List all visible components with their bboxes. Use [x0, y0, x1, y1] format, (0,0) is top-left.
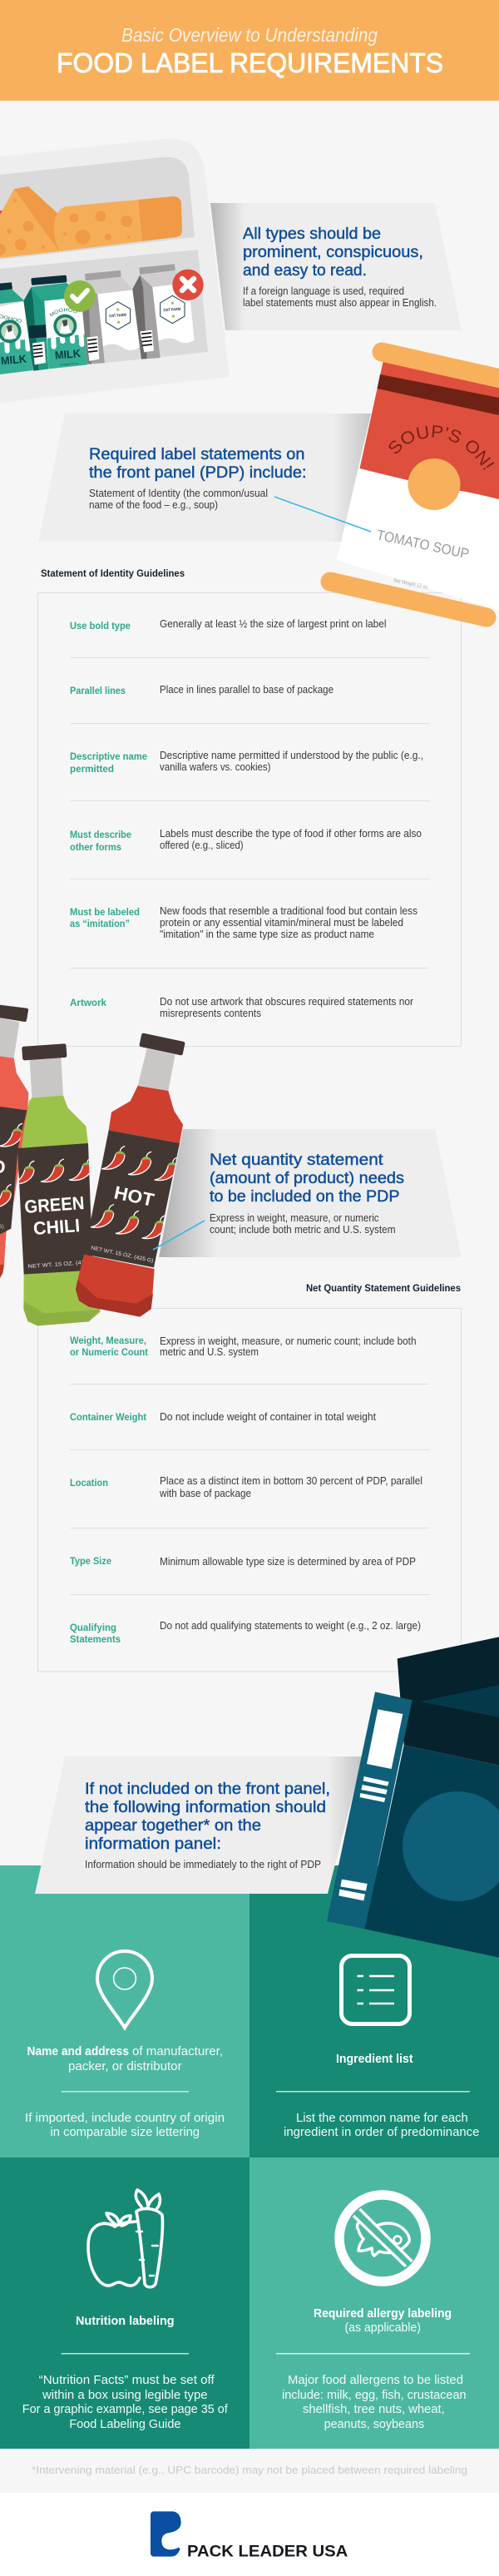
carton D: [132, 264, 195, 359]
callout heading: information panel:: [85, 1835, 221, 1853]
subtitle: Basic Overview to Understanding: [121, 24, 378, 46]
row: artwork: misrepresents contents: [160, 1008, 261, 1019]
cell: required allergy labeling: Required allergy labeling: [314, 2307, 452, 2321]
panel: net quantity guidelines table: [38, 1308, 461, 1672]
callout heading: If not included on the front panel,: [85, 1780, 330, 1798]
cell: nutrition labeling: within a box using legible type: [42, 2389, 208, 2402]
callout body: [89, 488, 268, 511]
callout body: [210, 1212, 396, 1236]
row: use bold type: [70, 618, 386, 632]
logo wordmark: PACK LEADER USA: [187, 2544, 348, 2561]
row: must be labeled as imitation: protein or any essential vitamin/mineral must be labeled: [160, 917, 403, 929]
icon: apple and carrot: [88, 2190, 162, 2287]
can brand text: SOUP’S ON!: [389, 425, 494, 470]
callout heading: the front panel (PDP) include:: [89, 463, 306, 482]
row: must be labeled as imitation: New foods that resemble a traditional food but contain less: [160, 905, 417, 917]
logo mark: [151, 2511, 181, 2557]
row: location: Place as a distinct item in bottom 30 percent of PDP, parallel: [160, 1475, 422, 1487]
title: FOOD LABEL REQUIREMENTS: [57, 47, 443, 78]
logo: pack leader usa: [151, 2511, 348, 2561]
callout heading: to be included on the PDP: [210, 1187, 399, 1206]
panel: statement of identity guidelines table: [38, 592, 461, 1047]
cell: required allergy labeling: include: milk, egg, fish, crustacean: [282, 2389, 467, 2402]
row: qualifying statements: [70, 1620, 421, 1645]
callout body: label statements must also appear in English.: [243, 297, 437, 309]
cell: nutrition labeling: For a graphic example, see page 35 of: [22, 2403, 229, 2416]
row: must describe other forms: Labels must describe the type of food if other forms are also: [160, 828, 422, 840]
row: use bold type: Generally at least ½ the size of largest print on label: [160, 618, 386, 630]
icon: no fish: [339, 2195, 426, 2281]
callout: required label statements: [38, 414, 374, 542]
row: must be labeled as imitation: "imitation" in the same type size as product name: [160, 929, 374, 940]
row: qualifying statements: Do not add qualifying statements to weight (e.g., 2 oz. large): [160, 1620, 421, 1632]
illustration: hot sauce bottles: [0, 1004, 185, 1325]
callout heading: appear together* on the: [85, 1816, 261, 1835]
hot bottle: NET WT. 15 OZ. (425 G): [91, 1245, 154, 1264]
callout heading: [210, 1151, 404, 1206]
icon: green check: [64, 280, 96, 312]
callout heading: [89, 445, 306, 482]
green chili bottle: NET WT. 15 OZ. (425 G): [27, 1259, 97, 1270]
cell: name and address: packer, or distributor: [68, 2060, 182, 2073]
row: weight measure or numeric count: Weight, Measure,: [70, 1335, 146, 1346]
carton B: net weight 16 fl. oz.: [60, 361, 79, 366]
illustration: stacked books: [327, 1637, 499, 1958]
callout body: If a foreign language is used, required: [243, 285, 404, 297]
row: must describe other forms: Must describe: [70, 829, 131, 840]
row: descriptive name permitted: Descriptive name permitted if understood by the public (e.g.,: [160, 750, 423, 761]
callout: all types prominent: [210, 203, 462, 330]
row: must describe other forms: offered (e.g., sliced): [160, 840, 244, 851]
heading: statement of identity guidelines: Statement of Identity Guidelines: [41, 567, 185, 579]
icon: milk and oat cartons: [0, 264, 195, 374]
row: weight measure or numeric count: or Numeric Count: [70, 1346, 148, 1358]
carton C: [82, 270, 141, 364]
row: descriptive name permitted: [70, 750, 423, 775]
row: must describe other forms: other forms: [70, 841, 121, 853]
heading: net quantity statement guidelines: Net Quantity Statement Guidelines: [306, 1282, 461, 1294]
row: parallel lines: [70, 684, 333, 696]
row: parallel lines: Place in lines parallel to base of package: [160, 684, 333, 696]
cell: ingredient list: [276, 1955, 479, 2139]
callout body: count; include both metric and U.S. system: [210, 1224, 396, 1236]
cell: required allergy labeling: [276, 2195, 470, 2431]
callout heading: and easy to read.: [243, 261, 367, 280]
row: location: with base of package: [159, 1488, 251, 1499]
cell: ingredient list: ingredient in order of predominance: [284, 2126, 479, 2139]
row: parallel lines: Parallel lines: [70, 685, 126, 696]
row: container weight: [70, 1411, 376, 1423]
cell: required allergy labeling: Major food allergens to be listed: [288, 2374, 463, 2387]
row: container weight: Container Weight: [70, 1411, 146, 1423]
callout heading: the following information should: [85, 1798, 326, 1816]
cell: nutrition labeling: Nutrition labeling: [76, 2315, 175, 2328]
cell: name and address: [25, 1951, 225, 2139]
cell: nutrition labeling: Food Labeling Guide: [69, 2418, 180, 2431]
carton B: [23, 275, 87, 371]
cell: required allergy labeling: (as applicable): [344, 2321, 421, 2335]
cell: required allergy labeling: peanuts, soybeans: [324, 2418, 424, 2431]
carton A: [0, 282, 32, 374]
header banner: [0, 0, 499, 101]
carton D: OAT FARM: [163, 307, 180, 313]
carton A: MILK: [0, 353, 27, 367]
callout heading: Net quantity statement: [210, 1151, 383, 1169]
row: artwork: Do not use artwork that obscures required statements nor: [160, 996, 413, 1008]
callout heading: [85, 1780, 330, 1853]
hot bottle: HOT: [112, 1181, 156, 1211]
callout heading: All types should be: [243, 225, 381, 243]
cell: name and address: in comparable size lettering: [50, 2126, 200, 2139]
row: type size: Minimum allowable type size is determined by area of PDP: [160, 1556, 416, 1568]
callout: net quantity statement: [159, 1129, 462, 1257]
carton C: OAT FARM: [109, 313, 126, 319]
callout body: [243, 285, 437, 309]
callout body: Express in weight, measure, or numeric: [210, 1212, 379, 1224]
row: artwork: Artwork: [70, 997, 106, 1008]
callout body: Information should be immediately to the right of PDP: [85, 1859, 321, 1870]
row: descriptive name permitted: Descriptive name: [70, 751, 147, 762]
icon: cheese: [0, 186, 182, 258]
callout heading: (amount of product) needs: [210, 1169, 404, 1187]
row: descriptive name permitted: permitted: [70, 763, 114, 775]
row: location: [70, 1475, 422, 1499]
can bottom lid: [330, 582, 487, 617]
row: must be labeled as imitation: [70, 905, 417, 940]
green chili bottle: GREEN: [24, 1192, 85, 1217]
callout: if not included on the front panel: [35, 1756, 363, 1894]
row: container weight: Do not include weight of container in total weight: [160, 1411, 376, 1423]
can top lid: [382, 352, 499, 381]
cell: ingredient list: List the common name for each: [296, 2112, 468, 2125]
arrow: net weight pointer line: [153, 1221, 205, 1250]
can net weight: Net Weight 12 oz.: [393, 577, 429, 591]
left red bottle: [0, 1004, 28, 1278]
row: must describe other forms: [70, 828, 422, 853]
row: qualifying statements: Statements: [70, 1633, 121, 1645]
can product name: TOMATO SOUP: [375, 527, 471, 562]
footnote: *Intervening material (e.g., UPC barcode) may not be placed between required labeling: [32, 2464, 467, 2476]
callout heading: Required label statements on: [89, 445, 304, 463]
row: descriptive name permitted: vanilla wafers vs. cookies): [160, 761, 271, 773]
row: type size: [70, 1555, 416, 1568]
illustration: soup can: [321, 343, 499, 627]
row: weight measure or numeric count: Express in weight, measure, or numeric count; include both: [160, 1335, 417, 1347]
cell: nutrition labeling: “Nutrition Facts” must be set off: [39, 2374, 215, 2387]
icon: location pin: [97, 1951, 152, 2028]
row: weight measure or numeric count: [70, 1335, 417, 1358]
row: use bold type: Use bold type: [70, 620, 131, 632]
cell: name and address: Name and address: [27, 2045, 129, 2058]
row: qualifying statements: Qualifying: [70, 1622, 116, 1633]
callout heading: prominent, conspicuous,: [243, 243, 423, 261]
carton B: MOOHOO: [50, 308, 77, 316]
row: weight measure or numeric count: metric and U.S. system: [160, 1346, 259, 1358]
green chili bottle: [17, 1043, 101, 1326]
cell: ingredient list: Ingredient list: [336, 2053, 413, 2066]
illustration: store shelf: [0, 156, 208, 374]
cell: required allergy labeling: shellfish, tree nuts, wheat,: [303, 2403, 445, 2416]
green chili bottle: CHILI: [32, 1215, 81, 1239]
hot bottle: [76, 1033, 185, 1317]
cell: name and address: of manufacturer,: [132, 2045, 223, 2058]
row: artwork: [70, 996, 413, 1019]
panel: teal information grid: [0, 1865, 499, 2449]
callout body: Statement of Identity (the common/usual: [89, 488, 268, 499]
row: must be labeled as imitation: Must be labeled: [70, 906, 140, 918]
cell: nutrition labeling: [22, 2190, 229, 2431]
callout body: name of the food – e.g., soup): [89, 499, 218, 511]
icon: red cross: [172, 270, 204, 300]
arrow: identity pointer line: [274, 497, 371, 532]
carton B: MILK: [54, 347, 82, 362]
callout heading: [243, 225, 423, 280]
row: must be labeled as imitation: as “imitation”: [70, 918, 130, 929]
row: location: Location: [70, 1477, 108, 1489]
icon: list: [341, 1955, 409, 2024]
cell: name and address: If imported, include country of origin: [25, 2112, 225, 2125]
row: type size: Type Size: [70, 1555, 111, 1567]
